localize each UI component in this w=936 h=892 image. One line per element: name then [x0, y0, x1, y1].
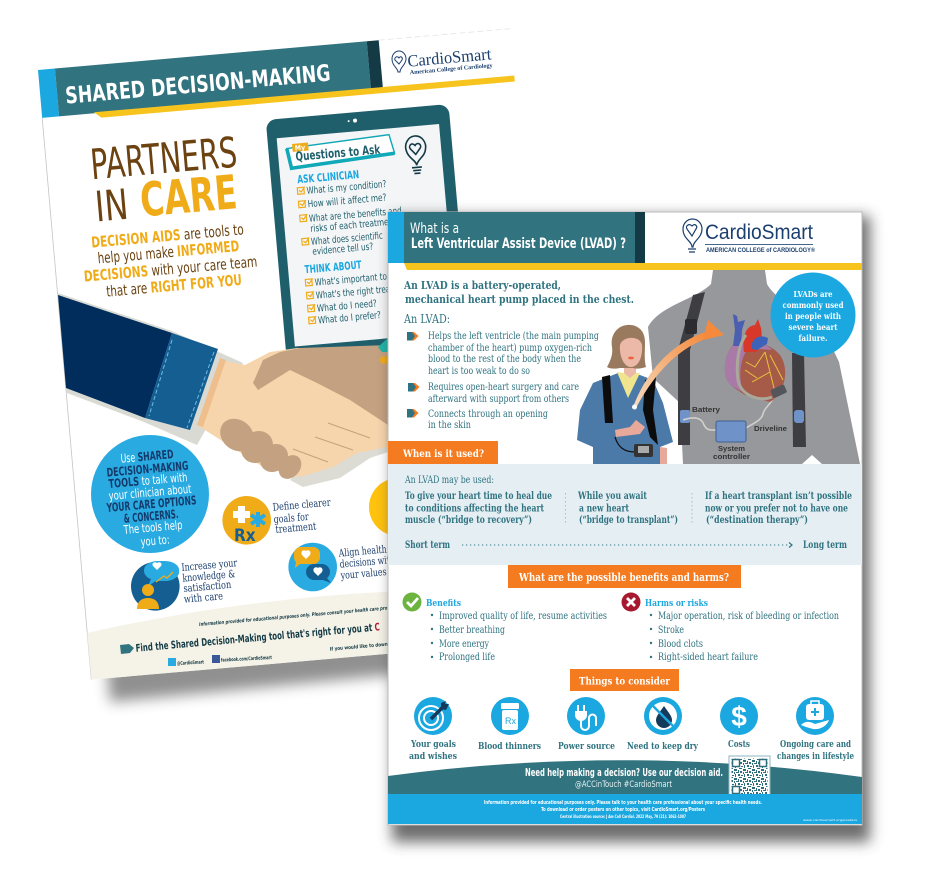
poster sheet	[388, 212, 862, 825]
icon: speech bubbles with hearts	[288, 543, 337, 591]
labels: things to consider: Power source	[558, 742, 615, 752]
column: bridge to recovery: to conditions affecting the heart	[405, 504, 544, 514]
text block: decision aids intro: DECISIONS with your care team	[83, 253, 258, 286]
icon: goals target	[414, 697, 452, 735]
checklist: ask clinician	[296, 165, 405, 259]
labels: things to consider	[409, 740, 854, 762]
icon: person with thought bubble	[131, 561, 180, 611]
callout: shared decision-making tools circle: The tools help	[122, 518, 183, 537]
checklist: ask clinician: What does scientific	[311, 231, 383, 248]
callout: severe heart failure circle: LVADs are	[794, 289, 832, 299]
shadow: rear poster	[62, 70, 545, 702]
list: benefits	[402, 592, 607, 663]
heading: partners in care	[88, 128, 243, 233]
list: harms or risks: Right-sided heart failure	[658, 652, 758, 663]
LVAD part labels: controller	[713, 452, 750, 461]
text: increase knowledge	[181, 557, 238, 606]
callout: shared decision-making tools circle: your clinician about	[108, 482, 192, 503]
column: destination therapy: (“destination therapy”)	[706, 515, 808, 526]
callout: severe heart failure circle: in people with	[785, 311, 841, 321]
heading: when is it used: When is it used?	[402, 448, 484, 460]
list: harms or risks	[622, 592, 839, 663]
timeline: short term to long term	[405, 540, 847, 551]
callout: severe heart failure circle: severe heart	[788, 322, 838, 332]
text: align health care decisions: Align health care	[337, 542, 407, 560]
callout: severe heart failure circle: commonly used	[782, 300, 844, 310]
text: LVAD introduction: An LVAD is a battery-operated,	[403, 278, 561, 292]
panel: LVAD use timeline	[388, 464, 862, 565]
logo: CardioSmart rear: American College of Cardiology	[410, 63, 493, 76]
list: LVAD facts: Helps the left ventricle (the main pumping	[428, 331, 599, 342]
checklist: think about: What do I need?	[317, 298, 377, 315]
footer band: decision aid: Need help making a decision? Use our decision aid.	[525, 767, 723, 779]
list: LVAD facts: Requires open-heart surgery and care	[428, 382, 579, 393]
callout: shared decision-making tools circle	[91, 435, 209, 553]
illustration: person wearing LVAD	[577, 320, 724, 464]
labels: things to consider: changes in lifestyle	[777, 752, 854, 762]
column: bridge to recovery: muscle (“bridge to recovery”)	[405, 515, 532, 526]
text: LVAD introduction: An LVAD:	[403, 312, 450, 326]
heading: when is it used	[388, 441, 498, 464]
column: bridge to transplant: a new heart	[579, 504, 629, 514]
illustration: torso with LVAD system	[648, 270, 860, 464]
column: bridge to transplant: While you await	[577, 491, 647, 502]
header band: SHARED DECISION-MAKING	[64, 61, 332, 110]
logo: CardioSmart: CardioSmart	[705, 220, 813, 244]
questions to ask title: Questions to Ask	[295, 141, 381, 164]
footer: disclaimer: To download or order posters on other topics, visit CardioSmart.org/Posters	[541, 807, 705, 813]
list: LVAD facts	[407, 331, 599, 431]
panel: LVAD poster	[388, 212, 862, 825]
checklist: think about: THINK ABOUT	[304, 258, 362, 276]
text: define clearer goals: goals for	[273, 511, 310, 526]
icon: power plug	[567, 697, 605, 735]
checklist: ask clinician: risks of each treatment?	[310, 216, 401, 235]
labels: things to consider: Need to keep dry	[627, 742, 699, 752]
logo: CardioSmart	[683, 219, 816, 254]
list: LVAD facts: heart is too weak to do so	[428, 366, 530, 377]
text block: decision aids intro	[80, 219, 259, 302]
text block: decision aids intro: help you make INFORMED	[97, 237, 240, 267]
illustration: handshake	[58, 293, 388, 487]
list: LVAD facts: chamber of the heart) pump oxygen-rich	[428, 343, 592, 354]
list: LVAD facts: Connects through an opening	[428, 409, 548, 420]
callout: shared decision-making tools circle: you to:	[140, 533, 170, 549]
icon: pill bottle	[491, 697, 529, 735]
icon: no water	[644, 697, 682, 735]
LVAD part labels: System	[718, 444, 745, 453]
text: increase knowledge: satisfaction	[183, 579, 232, 595]
list: harms or risks: Harms or risks	[645, 598, 708, 609]
footer text: rear poster: Information provided for educational purposes only. Please consult your health care provider about your needs.	[199, 601, 439, 628]
column: bridge to transplant: (“bridge to transplant”)	[579, 515, 678, 526]
icon: pill bottle: Rx	[505, 716, 516, 726]
text: increase knowledge: with care	[184, 590, 223, 606]
checklist: ask clinician: How will it affect me?	[307, 192, 387, 210]
text: LVAD introduction: mechanical heart pump placed in the chest.	[405, 292, 634, 306]
panel: shared decision-making poster	[38, 29, 564, 680]
list: harms or risks: Blood clots	[658, 639, 703, 650]
column: bridge to recovery: To give your heart time to heal due	[405, 491, 552, 502]
checklist: ask clinician: ASK CLINICIAN	[297, 168, 360, 186]
timeline: short term to long term: Short term	[405, 540, 450, 551]
LVAD part labels: Driveline	[754, 424, 787, 433]
header band	[38, 29, 515, 123]
footer text: rear poster: @CardioSmart	[177, 660, 205, 667]
checklist: ask clinician: What are the benefits and	[309, 206, 402, 225]
list: harms or risks: Stroke	[658, 625, 684, 636]
footer band	[86, 576, 564, 680]
text: increase knowledge: Increase your	[181, 557, 238, 574]
footer text: rear poster: facebook.com/CardioSmart	[221, 655, 273, 664]
text: define clearer goals: Define clearer	[272, 497, 332, 514]
footer band: decision aid: @ACCinTouch #CardioSmart	[575, 780, 672, 790]
column: destination therapy	[705, 491, 852, 526]
footer text: rear poster	[120, 601, 439, 667]
controller device	[634, 444, 653, 457]
questions to ask title	[286, 134, 395, 169]
shadow: front poster	[392, 216, 870, 842]
icon: red cross	[622, 592, 640, 612]
arrow: person to heart	[632, 320, 724, 410]
list: benefits: Prolonged life	[439, 652, 495, 663]
timeline: short term to long term: Long term	[803, 540, 847, 551]
questions to ask title: My	[294, 144, 306, 153]
text: increase knowledge: knowledge &	[182, 568, 236, 585]
checklist: ask clinician: What is my condition?	[306, 179, 387, 197]
header band: Left Ventricular Assist Device (LVAD) ?	[411, 236, 626, 252]
callout: shared decision-making tools circle: DECISION-MAKING	[106, 459, 189, 480]
labels: things to consider: Ongoing care and	[780, 740, 852, 750]
heading: things to consider: Things to consider	[579, 676, 670, 688]
text block: decision aids intro: that are RIGHT FOR YOU	[105, 271, 243, 301]
callout: shared decision-making tools circle: & CONCERNS.	[123, 507, 179, 526]
icon: partly hidden gold circle	[369, 478, 427, 536]
checklist: think about	[304, 254, 418, 327]
heart	[725, 314, 787, 402]
heading: partners in care: IN	[93, 180, 130, 231]
LVAD part labels: Battery	[692, 405, 721, 414]
harness straps	[678, 292, 806, 447]
callout: shared decision-making tools circle: YOUR CARE OPTIONS	[105, 493, 197, 515]
list: LVAD facts: blood to the rest of the body when the	[428, 354, 581, 365]
column: destination therapy: now or you prefer not to have one	[705, 504, 848, 514]
list: benefits: More energy	[439, 639, 489, 650]
logo: CardioSmart rear: CardioSmart	[407, 44, 492, 71]
labels: things to consider: and wishes	[409, 752, 457, 762]
icon: dollar sign: $	[731, 701, 747, 732]
header band	[388, 212, 862, 270]
heading: benefits and harms	[508, 565, 741, 588]
checklist: think about: What's the right treatment?	[315, 282, 416, 302]
LVAD part labels	[692, 405, 787, 461]
poster sheet	[38, 29, 564, 680]
icon: dollar sign	[720, 697, 758, 735]
checklist: think about: What do I prefer?	[318, 310, 381, 327]
icon: heart light bulb	[405, 135, 428, 174]
checklist: think about: What's important to me?	[314, 270, 405, 289]
text: align health care decisions: your values	[339, 566, 387, 582]
text block: decision aids intro: DECISION AIDS are tools to	[90, 220, 244, 252]
heading: benefits and harms: What are the possible benefits and harms?	[518, 571, 729, 584]
footer: disclaimer: Information provided for educational purposes only. Please talk to your health care professional about your specific health needs.	[484, 800, 762, 806]
icon: green check	[402, 592, 422, 612]
logo: CardioSmart: AMERICAN COLLEGE of CARDIOLOGY®	[706, 247, 816, 254]
footer text: rear poster: Find the Shared Decision-Making tool that's right for you at C	[135, 621, 380, 655]
list: benefits: Better breathing	[439, 625, 505, 636]
footer band: decision aid	[388, 760, 862, 795]
column: bridge to transplant	[577, 491, 678, 526]
text: define clearer goals: treatment	[275, 520, 317, 536]
list: benefits: Benefits	[426, 598, 461, 609]
footer: disclaimer: Central illustration source: J Am Coll Cardiol. 2022 May, 79 (21): 1062-1087	[560, 814, 686, 819]
text: LVAD introduction	[403, 278, 634, 326]
footer: disclaimer: www.cardiosmart.org/posters	[803, 818, 858, 822]
labels: things to consider: Your goals	[410, 740, 456, 750]
callout: shared decision-making tools circle: TOOLS to talk with	[108, 470, 188, 491]
column: bridge to recovery	[405, 491, 552, 526]
callout: severe heart failure circle: failure.	[798, 333, 828, 343]
header band: What is a	[410, 221, 459, 237]
panel: LVAD use timeline: An LVAD may be used:	[404, 475, 494, 486]
tablet with questions to ask	[266, 104, 469, 359]
heading: partners in care: CARE	[138, 165, 239, 228]
callout: severe heart failure circle	[770, 272, 856, 358]
labels: things to consider: Costs	[728, 740, 750, 750]
text: align health care decisions	[337, 542, 407, 582]
text: align health care decisions: decisions with	[339, 554, 395, 571]
callout: shared decision-making tools circle: Use SHARED	[120, 447, 174, 466]
list: harms or risks: Major operation, risk of bleeding or infection	[658, 611, 839, 622]
system controller	[716, 421, 746, 442]
footer: disclaimer	[388, 794, 862, 824]
text: define clearer goals	[272, 497, 332, 536]
footer text: rear poster: If you would like to download more posters	[330, 638, 430, 653]
checklist: ask clinician: evidence tell us?	[312, 241, 374, 258]
heading: things to consider	[570, 669, 679, 691]
labels: things to consider: Blood thinners	[478, 742, 541, 752]
QR code	[729, 756, 770, 797]
logo: CardioSmart rear	[392, 44, 493, 76]
icon: hand with medical kit	[796, 697, 834, 735]
column: destination therapy: If a heart transplant isn’t possible	[705, 491, 852, 502]
icon: medical cross and Rx	[222, 496, 271, 546]
icon: medical cross and Rx: Rx	[234, 526, 256, 546]
heading: partners in care: PARTNERS	[88, 128, 239, 189]
list: LVAD facts: afterward with support from others	[428, 394, 569, 405]
list: benefits: Improved quality of life, resume activities	[439, 611, 607, 622]
list: LVAD facts: in the skin	[428, 420, 471, 431]
